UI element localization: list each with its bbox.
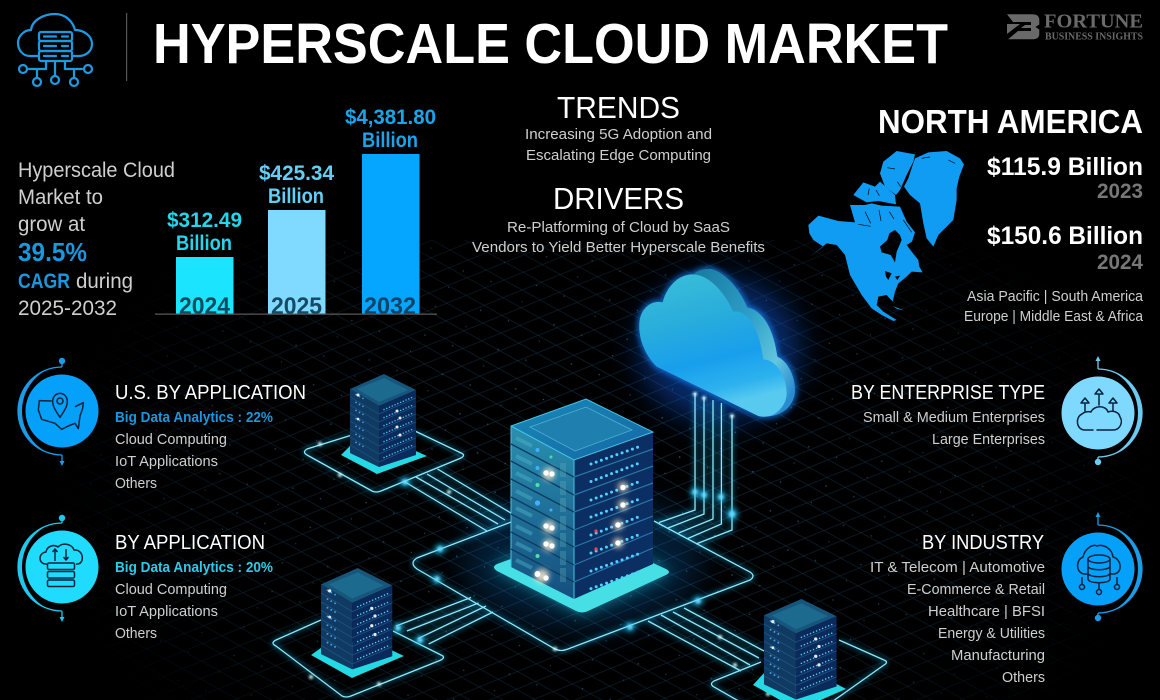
server bottom-left (311, 568, 404, 678)
text block: CAGR statement: Hyperscale Cloud (18, 158, 175, 182)
bar 2024: Billion (176, 232, 232, 255)
node halos (393, 477, 738, 645)
circuit lines (273, 393, 886, 700)
icon: USA map pin (18, 358, 98, 466)
edge highlights (511, 399, 653, 599)
bar 2032: 2032 (364, 293, 416, 320)
list: Small & Medium Enterprises (863, 409, 1045, 426)
list (115, 560, 273, 642)
text block: CAGR statement: grow at (18, 212, 85, 236)
server frame top-left (304, 431, 464, 492)
heading: U.S. BY APPLICATION (115, 382, 306, 404)
panel: trends: Increasing 5G Adoption and (525, 126, 712, 143)
icon: cloud with up arrows (1062, 356, 1142, 465)
LED rows (591, 446, 641, 589)
header divider (126, 13, 127, 81)
rack (321, 568, 392, 669)
circuit lines glow (273, 393, 886, 700)
logo mark (1007, 14, 1039, 39)
bar 2024: 2024 (179, 293, 231, 320)
text block: CAGR statement: Market to (18, 185, 103, 209)
list: IT & Telecom | Automotive (870, 559, 1045, 576)
list: Others (1002, 669, 1045, 686)
list: IoT Applications (115, 603, 218, 620)
segment: U.S. by application (18, 358, 306, 492)
bar chart: market size (155, 106, 437, 320)
list: Healthcare | BFSI (928, 603, 1045, 620)
glow behind cloud (640, 278, 800, 422)
bar 2024: $312.49 (167, 209, 242, 232)
list: Others (115, 475, 157, 492)
list: Others (115, 625, 157, 642)
map inlets (858, 157, 955, 232)
list: Manufacturing (951, 647, 1045, 664)
glow behind main server (462, 490, 702, 630)
bar 2032: $4,381.80 (345, 106, 436, 129)
list: Energy & Utilities (938, 625, 1045, 642)
list: E-Commerce & Retail (907, 581, 1045, 598)
value 2023: $115.9 Billion (987, 153, 1143, 181)
heading: BY ENTERPRISE TYPE (851, 382, 1045, 404)
panel: trends: Escalating Edge Computing (526, 147, 711, 164)
left rack rows (511, 444, 574, 582)
logo wordmark: FORTUNE (1044, 10, 1143, 32)
base plate glow (492, 531, 671, 613)
list: IoT Applications (115, 453, 218, 470)
list: Large Enterprises (932, 431, 1045, 448)
list (870, 559, 1045, 686)
list: Big Data Analytics : 22% (115, 410, 273, 426)
title: HYPERSCALE CLOUD MARKET (153, 12, 948, 76)
value 2024: $150.6 Billion (987, 222, 1143, 250)
plate (341, 442, 427, 474)
icon: cloud database (1062, 512, 1142, 621)
chart axis (155, 314, 437, 315)
cloud 3D (639, 269, 795, 417)
year 2023: 2023 (1097, 180, 1143, 203)
top face (511, 399, 653, 460)
bright LEDs (534, 470, 626, 581)
panel: trends: TRENDS (557, 90, 680, 125)
text block: CAGR statement: 2025-2032 (18, 296, 117, 320)
server bottom-right (753, 599, 846, 700)
map of north america (808, 151, 964, 321)
text block: CAGR statement: 39.5% (18, 237, 87, 267)
bar 2025: $425.34 (259, 162, 334, 185)
main server (492, 399, 671, 613)
icon: cloud server header logo (18, 14, 92, 86)
segment: by enterprise type (851, 356, 1142, 465)
cloud face (639, 274, 787, 417)
text block: CAGR statement (18, 158, 175, 320)
connector bundles (396, 469, 764, 671)
rack (350, 374, 416, 467)
logo: Fortune Business Insights (1007, 10, 1143, 42)
main loop (413, 521, 753, 650)
heading: BY APPLICATION (115, 532, 265, 554)
list: Cloud Computing (115, 431, 227, 448)
server top-left (341, 374, 427, 474)
panel: drivers: Vendors to Yield Better Hyperscale Benefits (472, 239, 765, 256)
illustration: cloud data center network (273, 269, 886, 700)
panel: north america (808, 103, 1144, 325)
panel: north america: Europe | Middle East & Africa (964, 309, 1144, 325)
year 2024: 2024 (1097, 251, 1143, 274)
right rack rows (574, 449, 653, 582)
bright LED glow (535, 468, 628, 583)
list (115, 410, 273, 492)
plate (311, 640, 404, 678)
base plate (494, 533, 669, 612)
left slats (516, 438, 532, 568)
heading: NORTH AMERICA (878, 103, 1143, 140)
server frame bottom-right (712, 640, 886, 700)
logo tagline: BUSINESS INSIGHTS (1045, 32, 1143, 42)
text block: CAGR statement: CAGR (18, 270, 70, 293)
left face (511, 426, 574, 599)
list: Big Data Analytics : 20% (115, 560, 273, 576)
rack (764, 599, 837, 699)
icon: cloud server transfer (18, 515, 98, 622)
bar 2024 (167, 209, 242, 320)
plate (753, 670, 846, 700)
background perspective grid (0, 240, 1160, 700)
server frame bottom-left (273, 620, 444, 697)
segment: by industry (870, 512, 1142, 686)
status LEDs (535, 448, 598, 558)
list: Cloud Computing (115, 581, 227, 598)
bar 2032: Billion (362, 129, 418, 152)
other regions: Asia Pacific | South America (967, 289, 1144, 305)
text block: CAGR statement: during (76, 269, 133, 293)
bar 2025 (259, 162, 334, 320)
left side handles (560, 463, 566, 582)
bar 2032 (345, 106, 436, 320)
heading: BY INDUSTRY (922, 532, 1044, 554)
network glow nodes (309, 392, 827, 696)
segment: by application (18, 515, 273, 642)
cloud glow (639, 269, 795, 417)
panel: drivers: DRIVERS (553, 181, 684, 216)
panel: drivers: Re-Platforming of Cloud by SaaS (507, 219, 730, 236)
cloud uplinks (659, 393, 732, 544)
cloud extrusion (693, 269, 795, 417)
bar 2025: Billion (268, 185, 324, 208)
list (863, 409, 1045, 448)
panel: trends (525, 90, 712, 164)
right face (574, 432, 653, 599)
panel: drivers (472, 181, 765, 256)
bar 2025: 2025 (271, 293, 322, 320)
